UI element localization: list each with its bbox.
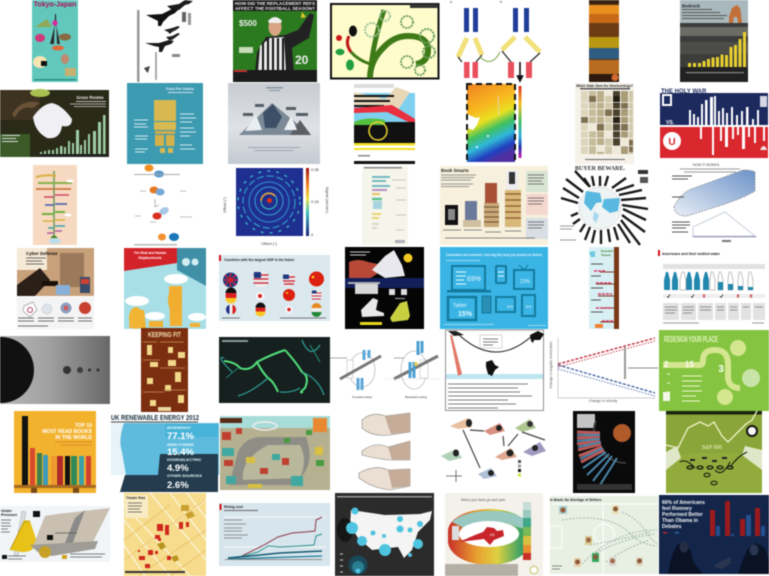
heading: Cyber Defense xyxy=(26,251,58,256)
thumbnail: UK renewable energy: 2.6% xyxy=(167,480,189,491)
thumbnail: black sneaker poster xyxy=(345,247,424,329)
thumbnail: national flags xyxy=(219,255,330,321)
thumbnail: UK renewable energy: 77.1% xyxy=(167,431,194,442)
thumbnail: rivalry chart xyxy=(660,89,768,158)
thumbnail: ring chart: US xyxy=(490,533,495,537)
tablet body xyxy=(32,508,110,549)
thumbnail: debate bars: feel Romney xyxy=(662,506,692,512)
thumbnail: dashed wedge chart: Change in angular momentum xyxy=(549,341,553,389)
thumbnail: spiral heat plot: 0 xyxy=(311,232,314,237)
thumbnail: beige heatmap xyxy=(575,83,634,164)
heading: Rising cost xyxy=(224,505,244,509)
thumbnail: blue sneaker blueprint xyxy=(672,163,756,242)
bars xyxy=(689,96,759,125)
series xyxy=(228,517,322,558)
thumbnail: antibody structure: b xyxy=(500,0,502,4)
shields row xyxy=(23,302,37,317)
thumbnail: redesign your place xyxy=(659,330,769,411)
thumbnail: spiral heat plot: Offset (") xyxy=(261,241,278,246)
thumbnail: keeping fit poster xyxy=(141,328,188,412)
thumbnail: most read books: MOST READ BOOKS xyxy=(42,429,93,435)
television xyxy=(514,270,534,289)
thumbnail: UK renewable energy: 4.9% xyxy=(167,463,189,474)
thumbnail: mars fan chart xyxy=(573,411,635,493)
calculator xyxy=(482,296,491,313)
thumbnail: skull comparison xyxy=(359,413,410,490)
thumbnail: debate bars: Than Obama in xyxy=(662,518,698,524)
title: Grass Routes xyxy=(76,95,104,100)
yellow cell xyxy=(10,520,38,552)
thumbnail: blue grain poster: Food For Grains xyxy=(166,87,194,91)
headline: HOW DID THE REPLACEMENT REFS xyxy=(235,1,315,6)
thumbnail: ring chart: Where your taxes go each year xyxy=(461,498,506,502)
thumbnail: rivalry chart: U xyxy=(668,137,676,148)
thumbnail: most read books xyxy=(14,411,96,493)
thumbnail: spiral heat plot: 0.35 xyxy=(311,167,320,172)
thumbnail: book stacks xyxy=(440,166,548,245)
thumbnail: replacement refs poster: 20 xyxy=(295,53,309,67)
heading: Bedrock xyxy=(682,4,701,8)
thumbnail: spiral heat plot: 0.15 xyxy=(311,199,320,204)
thumbnail: eclipse transit xyxy=(0,336,110,404)
portraits xyxy=(559,506,567,514)
tree trunk xyxy=(370,36,428,78)
thumbnail: molecular diagram: Backward swing xyxy=(405,395,427,399)
colour bar xyxy=(306,168,309,236)
description boxes xyxy=(663,303,765,320)
thumbnail: street map with pins xyxy=(124,493,206,576)
part-filled bottles xyxy=(680,272,753,290)
thumbnail: debate bars: Debates xyxy=(662,524,682,530)
thumbnail: debate bars xyxy=(659,495,769,574)
thumbnail: tablet cutaway: Pressure xyxy=(1,513,17,517)
monitor xyxy=(522,295,535,316)
thumbnail: tablet cutaway xyxy=(0,506,110,562)
thumbnail: debate bars: Performed Better xyxy=(662,512,703,518)
thumbnail: physics diagram xyxy=(446,330,544,410)
heading: Under xyxy=(1,509,12,513)
spiral xyxy=(261,193,277,209)
thumbnail: rising line chart xyxy=(219,503,330,566)
thumbnail: buyer beware world map xyxy=(558,165,650,247)
legend xyxy=(523,502,531,510)
thumbnail: replacement refs poster: AFFECT THE FOOTBALL SEASON? xyxy=(235,6,315,11)
thumbnail: S&P football chart xyxy=(666,411,762,493)
heading: BUYER BEWARE. xyxy=(575,166,626,172)
heading: 66% of Americans xyxy=(662,500,705,506)
heading: Countries with the largest GDP in the future xyxy=(224,258,295,262)
thumbnail: molecular diagram: Forward swing xyxy=(352,395,372,399)
thumbnail: skull evolution diagram xyxy=(441,418,546,482)
thumbnail: UK renewable energy xyxy=(111,414,219,492)
thumbnail: US bubble map xyxy=(335,493,434,576)
thumbnail: cyber warfare xyxy=(16,248,94,329)
tablet xyxy=(448,297,476,320)
thumbnail: UK renewable energy: WIND POWER xyxy=(167,442,194,447)
bars as books xyxy=(22,416,28,485)
bars xyxy=(710,510,715,536)
thumbnail: cotton bar chart xyxy=(0,89,109,157)
thumbnail: mountain triangle xyxy=(228,83,320,164)
side panels xyxy=(526,171,548,192)
thumbnail: replacement refs poster xyxy=(233,0,317,82)
radiating spikes xyxy=(561,171,648,245)
thumbnail: pale horizontal bars xyxy=(362,166,408,245)
heading: TOP 10 xyxy=(75,423,92,429)
thumbnail: blue sneaker blueprint: HOW IT WORKS xyxy=(693,163,720,167)
bars xyxy=(688,32,746,67)
check row xyxy=(663,294,765,298)
thumbnail: replacement refs poster: $500 xyxy=(239,19,257,28)
silhouettes xyxy=(668,542,703,574)
heatmap columns xyxy=(581,91,588,154)
thumbnail: soccer pitch portraits: In Brazil, No Shortage of Strikers xyxy=(550,498,602,502)
thumbnail: blue device share: Tablet xyxy=(453,303,467,309)
thumbnail: spiral heat plot: Signal (arcsec) xyxy=(325,187,330,214)
thumbnail: spiral heat plot xyxy=(222,167,330,246)
thumbnail: blue device share: 13% xyxy=(520,279,531,285)
thumbnail: tree strip: Branded xyxy=(601,249,613,253)
thumbnail: rainbow ocean map xyxy=(466,84,522,162)
flags xyxy=(223,272,238,288)
thumbnail: tree strip: Tweets xyxy=(601,253,611,257)
colour legend xyxy=(518,86,522,158)
phone xyxy=(496,266,506,283)
thumbnail: redesign your place: 3 xyxy=(718,364,724,375)
thumbnail: UK renewable energy: HYDROELECTRIC xyxy=(167,457,202,462)
thumbnail: UK renewable energy: OTHER SOURCES xyxy=(167,473,202,478)
thumbnail: protest infographic: Displacements xyxy=(138,256,162,260)
grain columns xyxy=(154,100,176,121)
thumbnail: earthquake map xyxy=(219,337,330,403)
heading: KEEPING FIT xyxy=(148,330,181,339)
thumbnail: redesign your place: 15 xyxy=(685,360,694,369)
arrow xyxy=(518,62,522,81)
thumbnail: water bottles: Americans and their bottled water xyxy=(662,252,721,256)
thumbnail: ring chart xyxy=(445,493,543,576)
heading: REDESIGN YOUR PLACE xyxy=(664,335,718,344)
thumbnail: dashed wedge chart: Change in velocity xyxy=(589,399,618,403)
heading: UK RENEWABLE ENERGY 2012 xyxy=(111,414,199,422)
climber xyxy=(729,5,742,23)
laptop xyxy=(452,266,485,290)
thumbnail: blue device share: 5% xyxy=(526,304,532,309)
thumbnail: illustrated car map xyxy=(220,416,330,490)
thumbnail: water bottles xyxy=(658,250,765,323)
thumbnail: tree strip xyxy=(589,247,619,329)
thumbnail: antibody structure: a xyxy=(450,0,452,4)
thumbnail: Tokyo-Japan poster xyxy=(32,0,78,82)
percentages: BIOENERGY xyxy=(167,425,191,430)
red rays xyxy=(577,432,604,462)
bars xyxy=(40,115,106,155)
coin stacks xyxy=(125,296,149,306)
thumbnail: protest infographic: The Real and Human xyxy=(134,251,166,255)
thumbnail: antibody structure xyxy=(450,0,540,81)
thumbnail: beige heatmap: Which Stats Stem the Shortcomings? xyxy=(576,84,633,88)
title: Tokyo-Japan xyxy=(34,2,76,8)
thumbnail: soccer pitch portraits xyxy=(550,496,658,574)
thumbnail: peach vertical tree xyxy=(33,165,77,245)
screen xyxy=(496,297,515,312)
thumbnail: orange timeline strip xyxy=(589,0,619,82)
thumbnail: spiral heat plot: Offset (") xyxy=(222,196,227,213)
thumbnail: dinosaur phylogeny xyxy=(137,0,193,82)
data bubbles xyxy=(352,508,358,514)
thumbnail: blue device share: 8% xyxy=(507,304,513,309)
thumbnail: dashed wedge chart xyxy=(549,338,658,403)
arrows xyxy=(463,430,545,468)
thumbnail: most read books: IN THE WORLD xyxy=(55,435,92,441)
title: THE HOLY WAR xyxy=(661,89,707,95)
heading: Book Smarts xyxy=(441,168,469,173)
thumbnail: rivalry chart: VS. xyxy=(666,120,675,126)
thumbnail: bedrock bar chart xyxy=(680,0,748,82)
thumbnail: UK renewable energy: 15.4% xyxy=(167,447,194,458)
thumbnail: blue device share: 15% xyxy=(458,311,473,318)
thumbnail: blue grain poster xyxy=(127,83,203,164)
cotton boll xyxy=(33,103,72,138)
thumbnail: blue device share: 69% xyxy=(467,276,481,283)
thumbnail: redesign your place: 2 xyxy=(664,360,669,369)
filled bottles xyxy=(664,272,709,290)
thumbnail: blue device share xyxy=(440,247,548,329)
blue rays xyxy=(577,435,617,485)
thumbnail: green tree diagram xyxy=(331,4,438,78)
heading: S&P 500 xyxy=(702,445,722,451)
legend bubble xyxy=(348,556,368,574)
thumbnail: molecular diagram xyxy=(330,341,440,399)
thumbnail: protein cartoon xyxy=(134,164,192,246)
passing arcs xyxy=(562,512,658,564)
thumbnail: cyclist poster xyxy=(354,83,415,164)
thumbnail: blue device share: Connections and commerce: how long they keep your product on shelves xyxy=(446,253,542,257)
thumbnail: protest infographic xyxy=(124,248,206,329)
thumbnail: street map with pins: Theater Row xyxy=(126,496,146,500)
